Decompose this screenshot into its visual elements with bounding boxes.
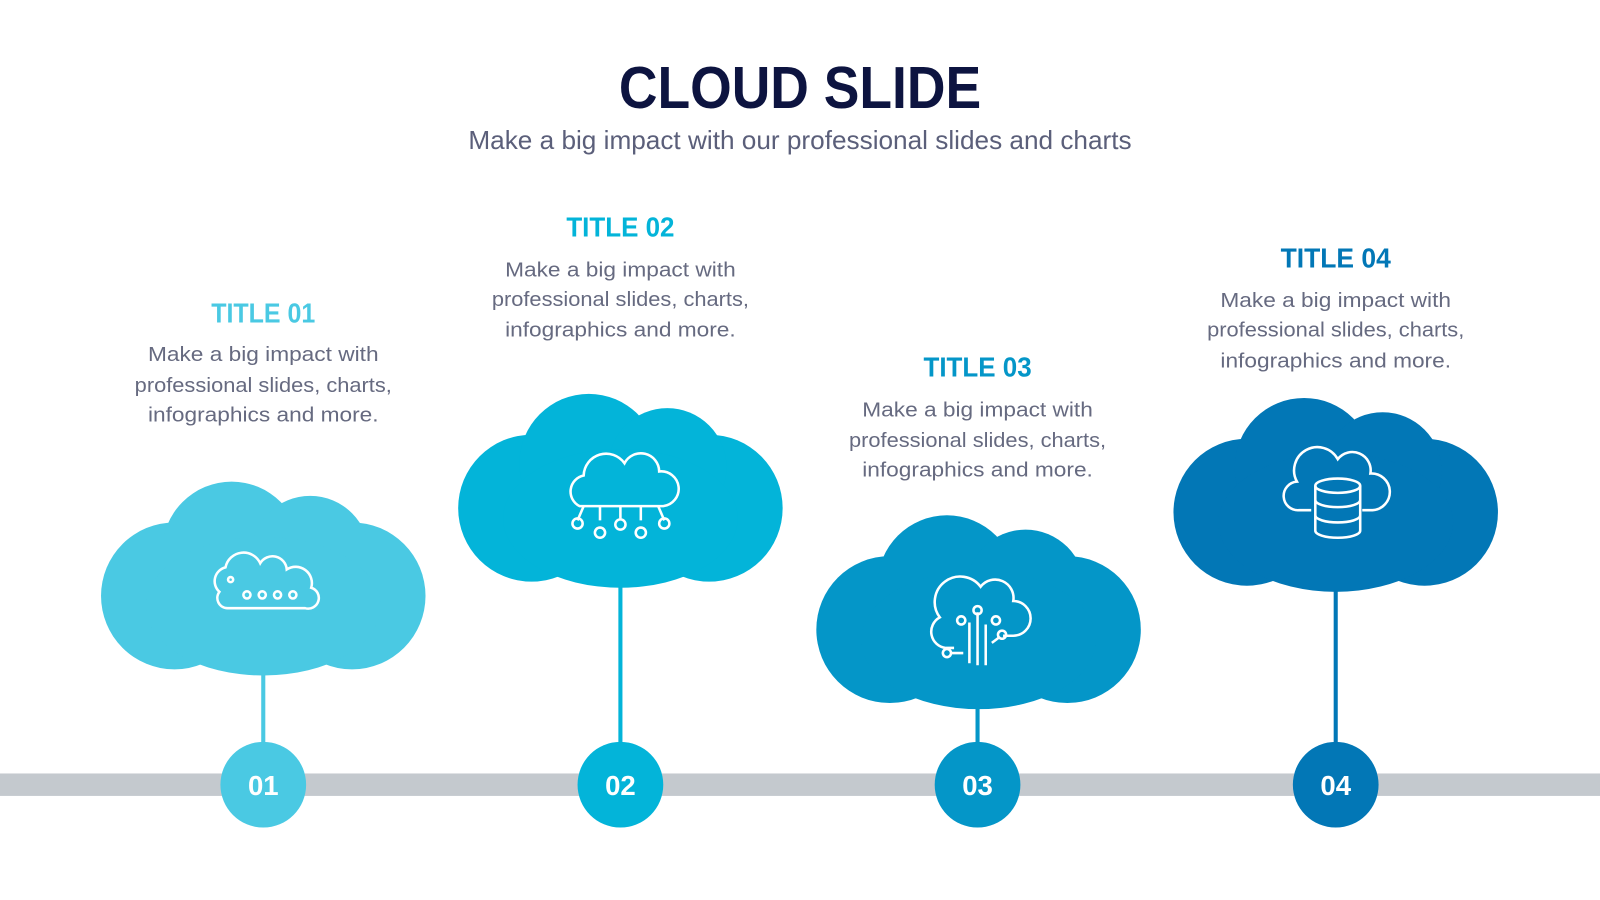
text: title 04	[1207, 242, 1464, 372]
text: title 02: professional slides, charts,	[492, 289, 749, 311]
icon: cloud database	[1284, 447, 1390, 538]
step 2	[458, 212, 783, 828]
timeline bar	[0, 773, 1600, 796]
text: title 01: Make a big impact with	[148, 344, 379, 366]
text: title 03: infographics and more.	[862, 460, 1093, 482]
icon: cloud network	[571, 453, 679, 538]
title: CLOUD SLIDE	[619, 54, 981, 121]
connector 1	[261, 653, 265, 755]
number badge 04: 04	[1320, 770, 1352, 801]
cloud 3	[816, 515, 1141, 709]
text: title 04: Make a big impact with	[1220, 290, 1451, 312]
number badge 02	[578, 742, 663, 828]
text: title 01: TITLE 01	[211, 297, 315, 328]
icon: cloud circuit	[931, 577, 1031, 665]
number badge 03: 03	[962, 770, 993, 801]
text: title 04: infographics and more.	[1220, 350, 1451, 372]
connector 3	[976, 694, 980, 755]
text: title 04: TITLE 04	[1281, 242, 1391, 273]
text: title 03	[849, 352, 1106, 482]
step 4	[1173, 242, 1498, 828]
text: title 03: Make a big impact with	[862, 399, 1093, 421]
connector 4	[1334, 571, 1338, 755]
number badge 03	[935, 742, 1020, 828]
text: title 02	[492, 212, 749, 342]
number badge 01	[220, 742, 306, 828]
step 3	[816, 352, 1141, 828]
text: title 04: professional slides, charts,	[1207, 320, 1464, 342]
text: title 03: TITLE 03	[923, 352, 1032, 383]
step 1	[101, 297, 426, 828]
number badge 01: 01	[248, 770, 279, 801]
text: title 01	[135, 297, 392, 426]
number badge 04	[1293, 742, 1379, 828]
text: title 02: infographics and more.	[505, 320, 736, 342]
icon: cloud with dots	[215, 553, 319, 609]
number badge 02: 02	[605, 770, 636, 801]
text: title 02: Make a big impact with	[505, 260, 736, 282]
text: title 03: professional slides, charts,	[849, 430, 1106, 452]
connector 2	[618, 571, 622, 755]
cloud 1	[101, 482, 426, 676]
cloud 4	[1173, 398, 1498, 592]
subtitle: Make a big impact with our professional slides and charts	[468, 127, 1132, 155]
text: title 01: professional slides, charts,	[135, 375, 392, 397]
cloud 2	[458, 394, 783, 588]
text: title 01: infographics and more.	[148, 404, 379, 426]
text: title 02: TITLE 02	[566, 212, 674, 243]
